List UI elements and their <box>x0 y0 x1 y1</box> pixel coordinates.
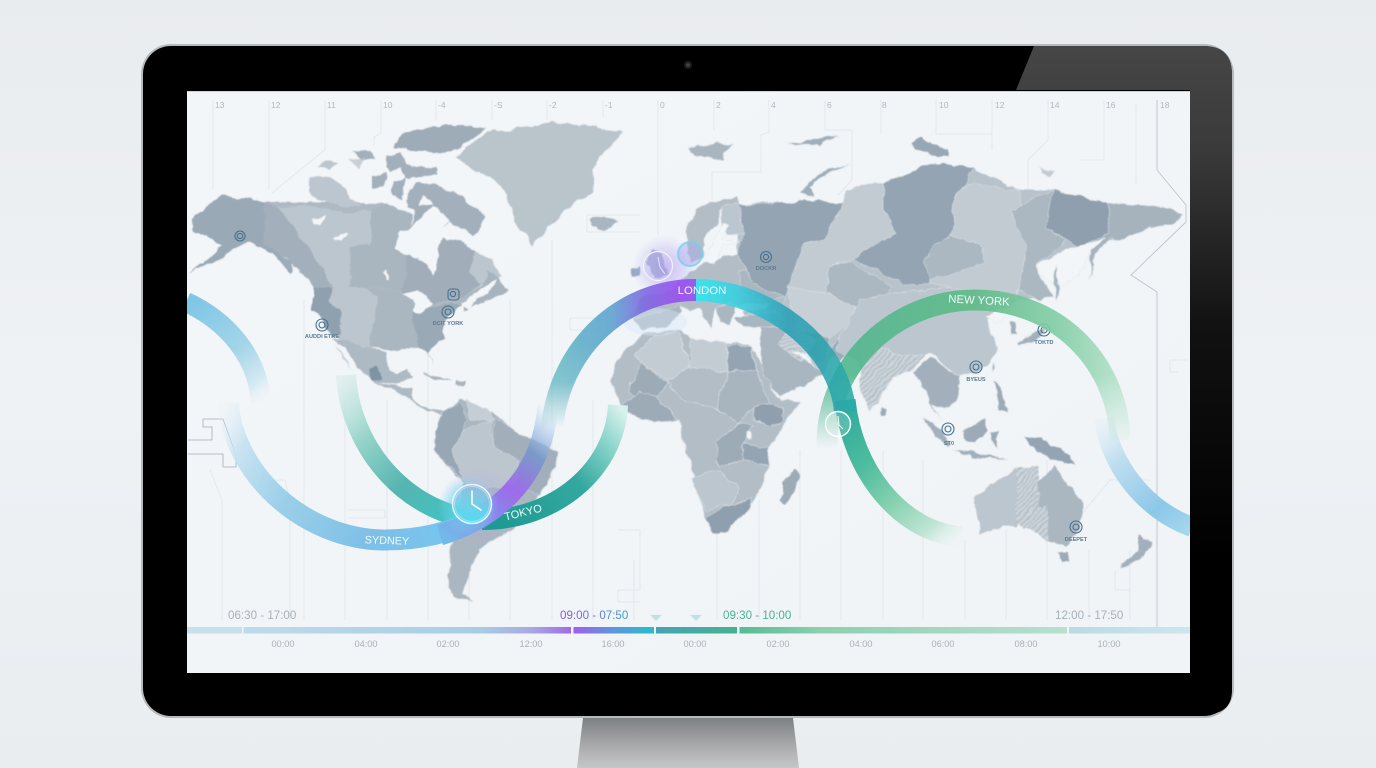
timeline time ranges: 06:30 - 17:00 <box>228 609 296 622</box>
New Zealand <box>1121 535 1151 570</box>
time zone numbers: 18 <box>1160 100 1170 110</box>
city marker labels <box>305 266 1088 543</box>
city marker labels: DEEPET <box>1065 537 1088 543</box>
city markers <box>235 231 1082 533</box>
timeline hour labels: 02:00 <box>766 639 790 649</box>
time zone numbers: 0 <box>660 100 665 110</box>
Madagascar <box>780 468 799 505</box>
timeline hour labels: 00:00 <box>684 639 706 649</box>
band: London <box>552 290 845 428</box>
city marker labels: DCIT YORK <box>433 321 463 327</box>
time zone numbers: 2 <box>716 100 721 110</box>
Asia <box>736 163 1183 463</box>
timeline markers <box>650 615 702 621</box>
time zone numbers: 13 <box>215 100 225 110</box>
time zone numbers: 14 <box>1050 100 1060 110</box>
British Isles <box>646 250 670 280</box>
timeline hour labels <box>272 640 1120 647</box>
timeline time ranges: 09:30 - 10:00 <box>723 609 791 622</box>
time zone numbers: 4 <box>771 100 776 110</box>
timeline hour labels: 08:00 <box>1014 639 1038 649</box>
city marker labels: AUDDI ETRE <box>305 334 339 340</box>
monitor bezel <box>141 44 1234 718</box>
band labels <box>365 285 1010 548</box>
city marker labels: BYEUS <box>966 377 986 383</box>
Greenland <box>456 122 623 245</box>
timeline time ranges: 09:00 - 07:50 <box>560 609 628 622</box>
time zone numbers: 12 <box>271 100 281 110</box>
time zone numbers: -1 <box>605 100 613 110</box>
time zone grid lines <box>210 100 1188 620</box>
city marker labels: TOKTD <box>1034 340 1054 346</box>
timeline hour labels: 16:00 <box>602 639 624 649</box>
timeline bar <box>186 627 1190 634</box>
Europe and Middle East <box>631 137 1054 397</box>
time zone numbers: 8 <box>882 100 887 110</box>
clock: main <box>441 479 496 530</box>
glow: Europe <box>624 240 694 336</box>
monitor stand <box>577 718 799 768</box>
time zone numbers: 12 <box>995 100 1005 110</box>
time zone numbers: -4 <box>438 100 446 110</box>
band: right blue <box>1104 418 1192 527</box>
time zone numbers: -2 <box>549 100 557 110</box>
time zone numbers: 11 <box>327 100 336 110</box>
Canadian Arctic islands <box>393 125 486 153</box>
timeline hour labels: 04:00 <box>850 639 872 649</box>
Hudson Bay, lakes <box>394 206 465 276</box>
Eurasia land base <box>703 163 1183 377</box>
timeline hour labels: 12:00 <box>520 639 542 649</box>
Australia <box>974 465 1083 561</box>
timeline time ranges: 12:00 - 17:50 <box>1055 609 1123 622</box>
band: top-left blue <box>186 302 261 403</box>
city marker labels: DOCKR <box>756 266 776 272</box>
Africa <box>611 330 799 533</box>
band labels: SYDNEY <box>365 534 409 548</box>
world map <box>190 122 1183 602</box>
time zone numbers: 6 <box>827 100 832 110</box>
screen <box>186 90 1192 673</box>
city marker labels: ST0 <box>944 441 954 447</box>
band: lower green <box>845 400 962 537</box>
webcam <box>684 61 692 69</box>
timeline hour labels: 00:00 <box>272 639 294 649</box>
glow: South America <box>488 488 498 496</box>
timeline hour labels: 06:00 <box>932 639 954 649</box>
band labels: NEW YORK <box>948 293 1010 309</box>
band labels: LONDON <box>678 285 726 297</box>
timeline hour labels: 02:00 <box>436 639 460 649</box>
timeline time ranges <box>228 610 1123 619</box>
timeline hour labels: 04:00 <box>354 639 378 649</box>
clock: London <box>644 252 672 280</box>
Iceland <box>591 216 619 230</box>
North America <box>190 125 509 415</box>
Svalbard and Arctic islands <box>688 143 733 160</box>
South America <box>433 400 559 602</box>
timeline hour labels: 10:00 <box>1098 639 1120 649</box>
band: Sydney <box>228 403 548 540</box>
band: Tokyo <box>346 375 618 520</box>
Baja coast <box>286 258 294 272</box>
time zone numbers: 10 <box>383 100 393 110</box>
time zone numbers: 10 <box>939 100 949 110</box>
time zone numbers: -S <box>494 100 503 110</box>
time zone numbers: 16 <box>1106 100 1116 110</box>
time zone numbers <box>216 102 1170 108</box>
marker: Baltic blue ring <box>678 242 702 266</box>
clock: Indian Ocean <box>826 412 850 436</box>
band: New York <box>827 300 1120 448</box>
band labels: TOKYO <box>503 502 544 523</box>
